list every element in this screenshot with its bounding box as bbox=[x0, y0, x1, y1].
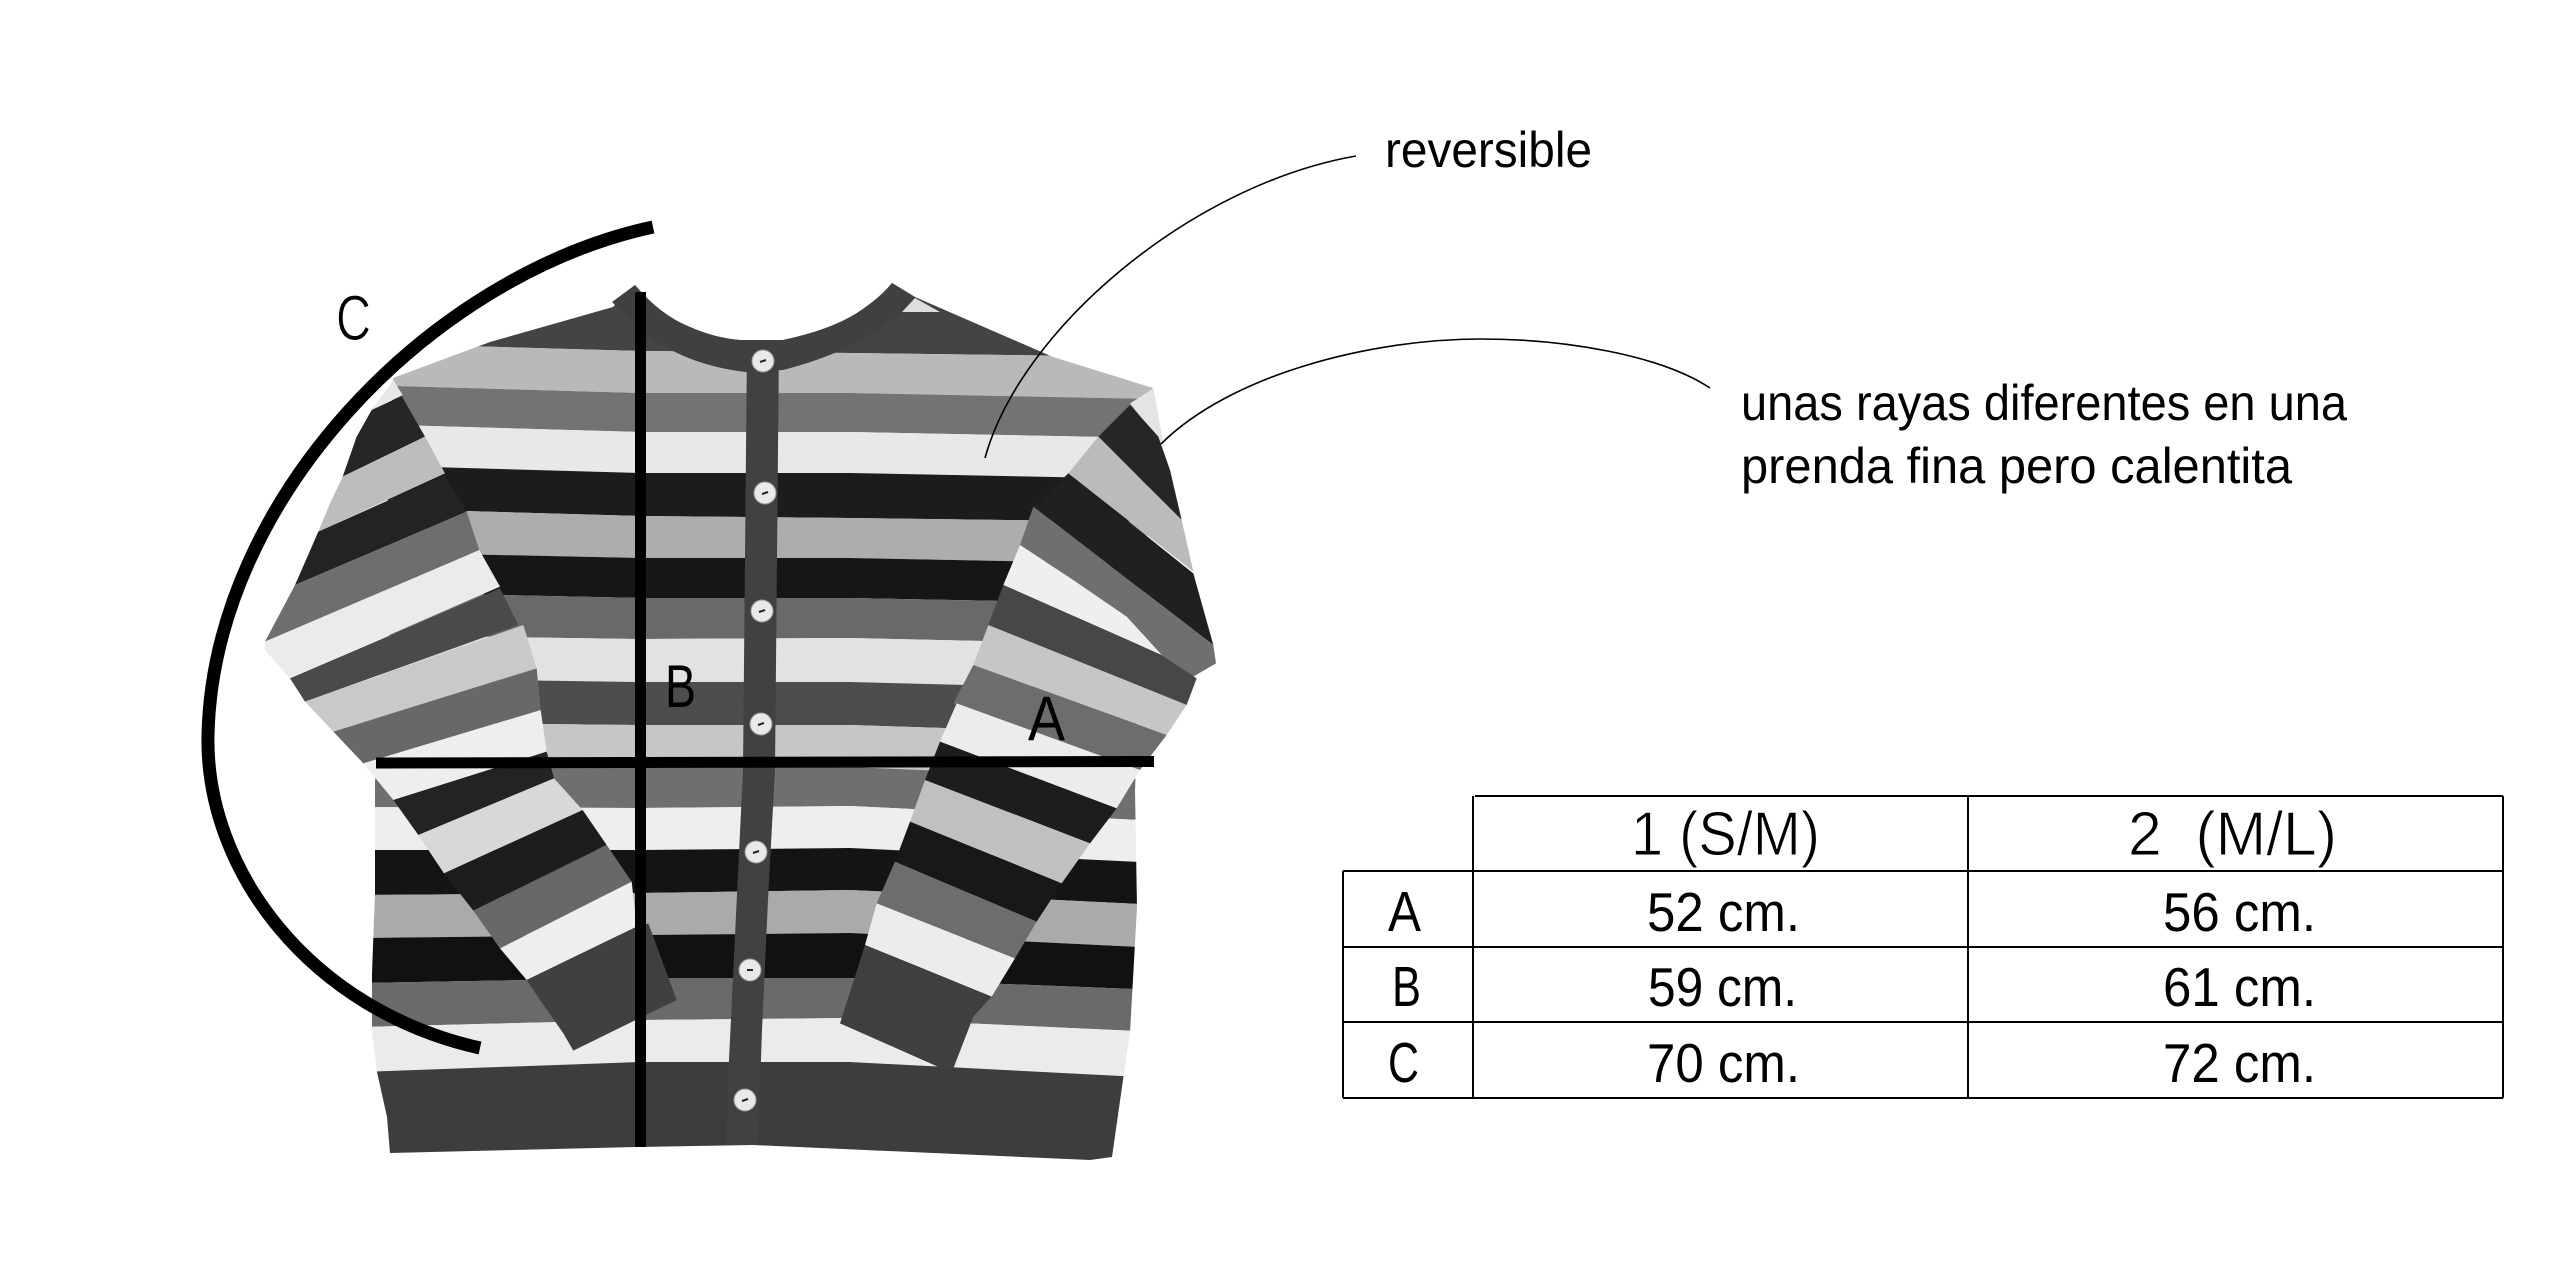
right sleeve upper bbox=[953, 388, 1216, 770]
row C: 70 cm. bbox=[1647, 1032, 1800, 1094]
row B: 61 cm. bbox=[2163, 956, 2316, 1018]
table header: 2 (M/L) bbox=[2128, 800, 2337, 869]
size table bbox=[1343, 796, 2503, 1098]
row C: C bbox=[1388, 1031, 1419, 1095]
callout text: stripes description: prenda fina pero calentita bbox=[1741, 438, 2292, 494]
row B bbox=[1392, 955, 2316, 1019]
measurement arc C bbox=[208, 227, 653, 1048]
callout text: stripes description bbox=[1741, 375, 2347, 494]
buttons bbox=[734, 350, 776, 1111]
table header bbox=[1631, 800, 2337, 869]
sweater body stripes bbox=[360, 270, 1160, 1170]
label B: B bbox=[665, 653, 696, 720]
table header: 1 (S/M) bbox=[1631, 800, 1820, 869]
row A: 56 cm. bbox=[2163, 881, 2316, 943]
row A: 52 cm. bbox=[1647, 881, 1800, 943]
callout text: stripes description: unas rayas diferentes en una bbox=[1741, 375, 2347, 431]
row C: 72 cm. bbox=[2163, 1032, 2316, 1094]
row C bbox=[1388, 1031, 2316, 1095]
sweater photo bbox=[265, 270, 1216, 1170]
left sleeve lower bbox=[305, 625, 677, 1051]
label A: A bbox=[1028, 684, 1065, 754]
row B: 59 cm. bbox=[1648, 956, 1797, 1018]
table grid bbox=[1343, 796, 2503, 1098]
callout line: reversible bbox=[985, 156, 1356, 458]
left sleeve upper bbox=[265, 380, 518, 702]
row A: A bbox=[1388, 880, 1421, 944]
collar bbox=[612, 283, 915, 372]
row B: B bbox=[1392, 955, 1421, 1019]
right sleeve lower bbox=[840, 703, 1140, 1068]
callout text: reversible: reversible bbox=[1385, 122, 1592, 178]
label C: C bbox=[336, 282, 371, 354]
measurement line A bbox=[376, 762, 1154, 763]
measurement line B bbox=[635, 292, 646, 1147]
callout line: stripes bbox=[1161, 339, 1710, 444]
row A bbox=[1388, 880, 2316, 944]
button placket bbox=[726, 345, 779, 1145]
